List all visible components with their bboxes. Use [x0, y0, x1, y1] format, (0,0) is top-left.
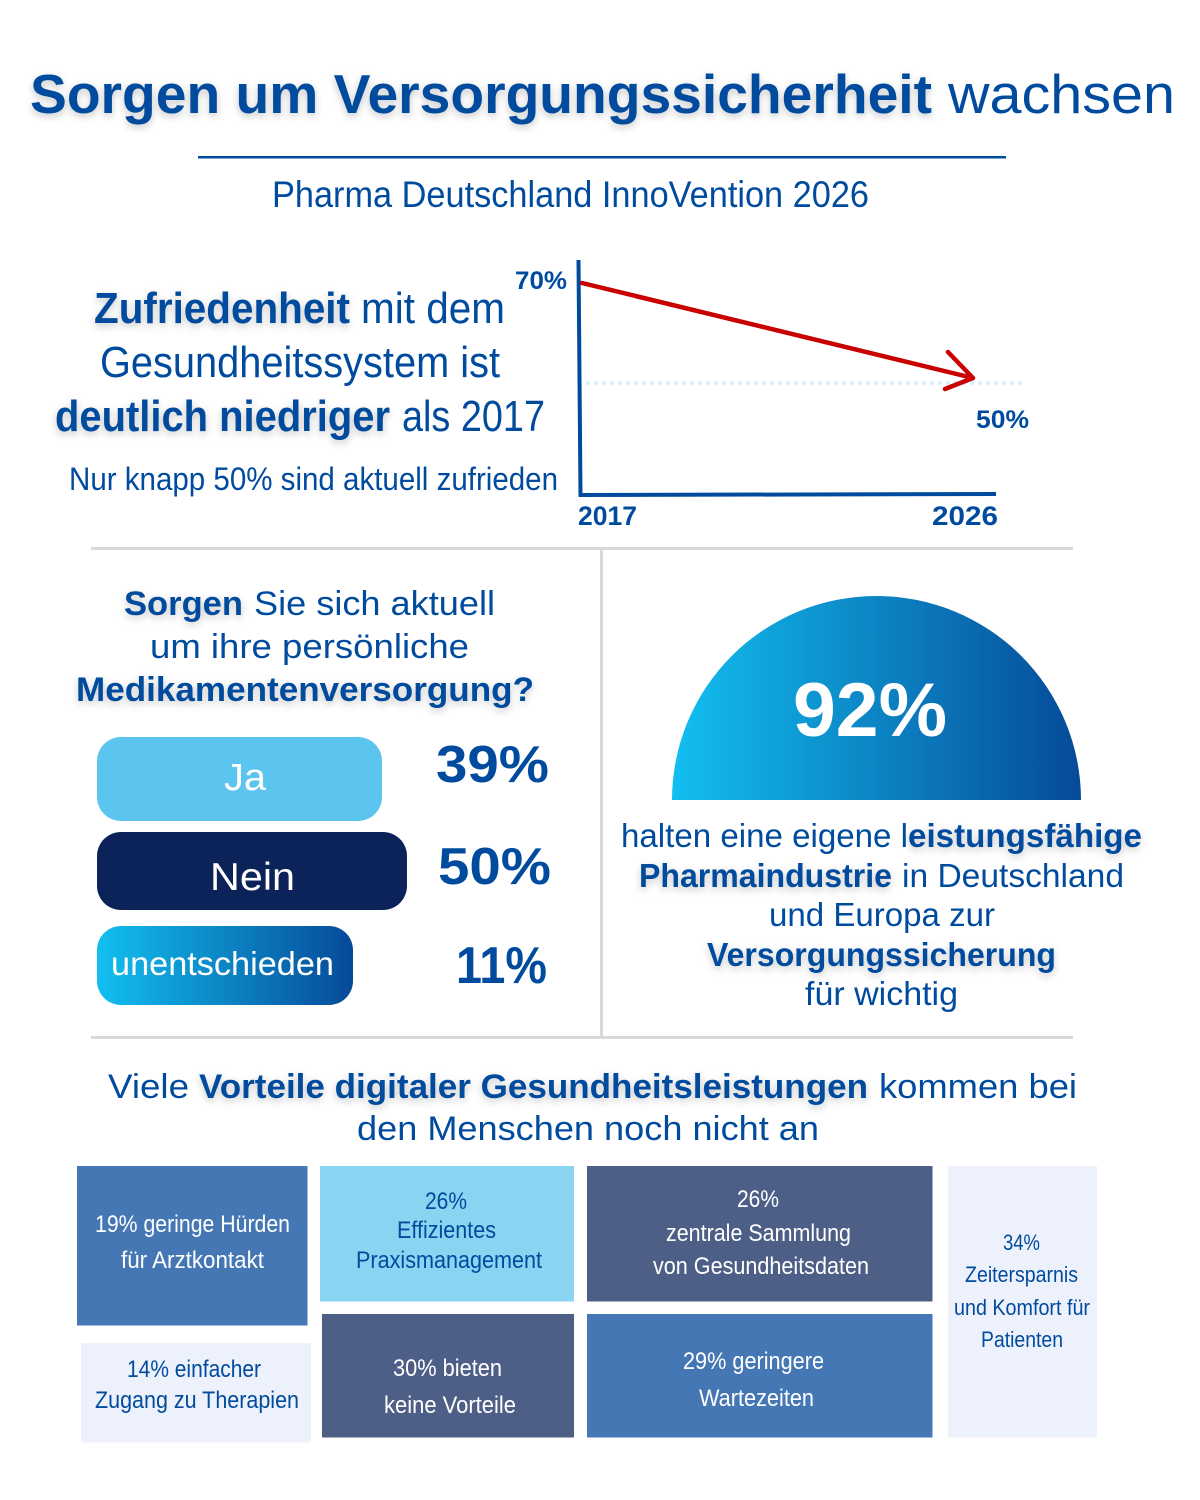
box: 19% Arztkontakt: 19% geringe Hürden — [95, 1211, 290, 1238]
box: 34% Zeitersparnis: 34% — [1003, 1230, 1040, 1255]
box: 29% Wartezeiten — [587, 1314, 932, 1438]
box: 26% Praxismanagement: Effizientes — [397, 1217, 496, 1244]
title: Sorgen um Versorgungssicherheit — [30, 63, 932, 125]
box: 26% Praxismanagement: 26% — [425, 1188, 467, 1215]
box: 14% Therapien: 14% einfacher — [127, 1356, 261, 1383]
box: 14% Therapien — [81, 1343, 311, 1442]
panel: satisfaction text: mit dem — [361, 284, 505, 333]
box: 34% Zeitersparnis: Patienten — [981, 1327, 1063, 1352]
semicircle: 92% — [672, 596, 1081, 800]
heading: digital health benefits: kommen bei — [879, 1068, 1077, 1106]
line chart: satisfaction 2017 to 2026: 2026 — [932, 501, 998, 531]
bar: unentschieden 11%: unentschieden — [111, 945, 334, 982]
box: 19% Arztkontakt: für Arztkontakt — [121, 1247, 264, 1274]
text block: pharma industry: Versorgungssicherung — [707, 936, 1056, 973]
text block: pharma industry: und Europa zur — [769, 896, 995, 933]
text block: pharma industry: für wichtig — [805, 975, 958, 1012]
box: 26% Praxismanagement: Praxismanagement — [356, 1247, 542, 1274]
text block: pharma industry: in Deutschland — [902, 857, 1124, 894]
line chart: satisfaction 2017 to 2026: 70% — [515, 267, 567, 295]
panel: medication worry question: um ihre persönliche — [150, 628, 469, 666]
box: 19% Arztkontakt — [77, 1166, 308, 1326]
panel: satisfaction text: Nur knapp 50% sind aktuell zufrieden — [69, 461, 558, 497]
box: 26% Gesundheitsdaten: zentrale Sammlung — [666, 1220, 851, 1247]
panel: satisfaction text: als 2017 — [402, 392, 545, 441]
semicircle: 92%: 92% — [793, 668, 947, 753]
heading: digital health benefits: Vorteile digitaler Gesundheitsleistungen — [199, 1068, 868, 1106]
panel: medication worry question: Sie sich aktuell — [254, 585, 495, 623]
box: 34% Zeitersparnis: und Komfort für — [954, 1295, 1090, 1320]
box: 26% Praxismanagement — [320, 1166, 574, 1302]
panel: medication worry question — [76, 585, 534, 709]
bar: unentschieden 11% — [97, 926, 547, 1005]
line chart: satisfaction 2017 to 2026: 2017 — [578, 501, 637, 531]
text block: pharma industry — [621, 817, 1142, 1012]
box: 26% Gesundheitsdaten — [587, 1166, 932, 1302]
bar: unentschieden 11%: 11% — [456, 937, 547, 995]
heading: digital health benefits: den Menschen noch nicht an — [357, 1110, 819, 1148]
bar: Ja 39%: Ja — [224, 757, 267, 799]
panel: satisfaction text: Gesundheitssystem ist — [100, 338, 500, 387]
panel: medication worry question: Medikamentenversorgung? — [76, 671, 534, 709]
panel: medication worry question: Sorgen — [124, 585, 243, 623]
text block: pharma industry: halten eine eigene l — [621, 817, 908, 854]
box: 34% Zeitersparnis — [948, 1166, 1097, 1438]
bar: Nein 50% — [97, 832, 551, 910]
box: 26% Gesundheitsdaten: 26% — [737, 1186, 779, 1213]
box: 29% Wartezeiten: 29% geringere — [683, 1348, 824, 1375]
text block: pharma industry: Pharmaindustrie — [639, 857, 892, 894]
line chart: satisfaction 2017 to 2026 — [515, 260, 1029, 531]
box: 30% keine Vorteile: keine Vorteile — [384, 1392, 516, 1419]
line chart: satisfaction 2017 to 2026: 50% — [976, 406, 1029, 434]
bar: Nein 50%: 50% — [438, 838, 551, 896]
title: wachsen — [947, 63, 1175, 125]
panel: satisfaction text: deutlich niedriger — [55, 392, 390, 441]
box: 14% Therapien: Zugang zu Therapien — [95, 1387, 299, 1414]
bar: Ja 39%: 39% — [436, 736, 549, 794]
box: 34% Zeitersparnis: Zeitersparnis — [965, 1262, 1078, 1287]
arrow: decline — [582, 283, 973, 389]
heading: digital health benefits: Viele — [108, 1068, 189, 1106]
box: 30% keine Vorteile — [322, 1314, 574, 1438]
panel: satisfaction text: Zufriedenheit — [94, 284, 350, 333]
bar: Nein 50%: Nein — [210, 856, 295, 899]
box: 30% keine Vorteile: 30% bieten — [393, 1355, 502, 1382]
heading: digital health benefits — [108, 1068, 1077, 1148]
bar: Ja 39% — [97, 736, 549, 821]
box: 29% Wartezeiten: Wartezeiten — [699, 1385, 814, 1412]
subtitle: Pharma Deutschland InnoVention 2026 — [272, 174, 869, 215]
text block: pharma industry: eistungsfähige — [908, 817, 1142, 854]
panel: satisfaction text — [55, 284, 558, 497]
box: 26% Gesundheitsdaten: von Gesundheitsdaten — [653, 1253, 869, 1280]
